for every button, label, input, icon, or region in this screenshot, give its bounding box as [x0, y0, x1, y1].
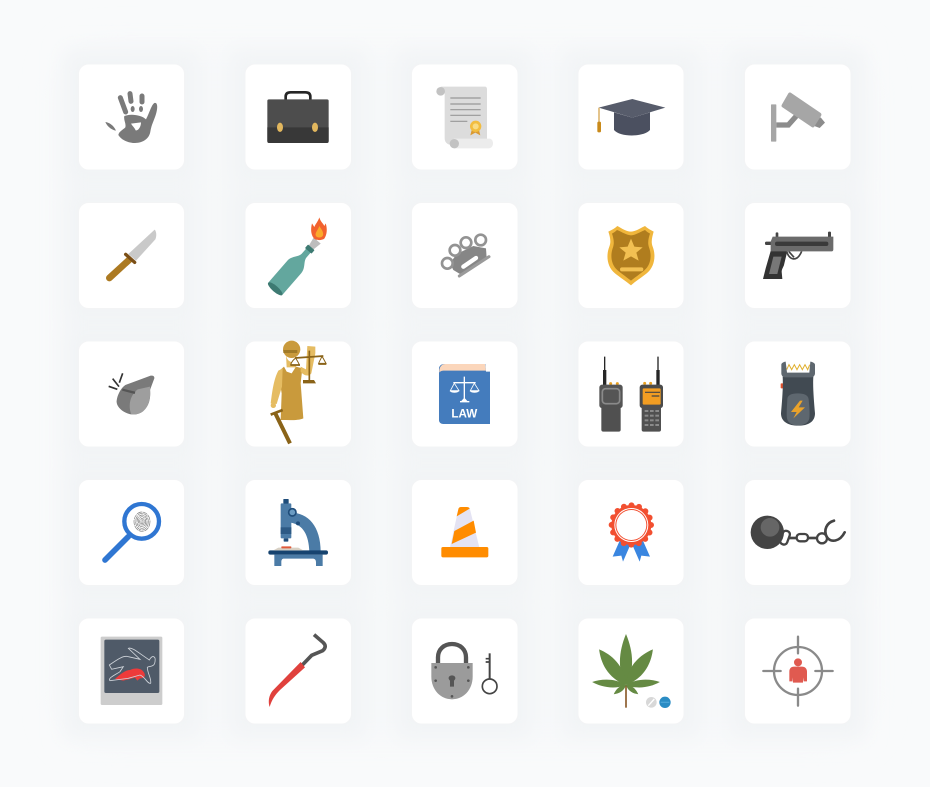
card: ball and chain [744, 480, 851, 586]
icon: lady justice [271, 341, 326, 443]
card: lady justice [245, 341, 352, 447]
card: brass knuckles [412, 202, 518, 308]
icon: police badge [607, 226, 654, 285]
card: molotov cocktail [245, 202, 352, 308]
icon: whistle [109, 373, 154, 415]
card: diploma scroll [412, 64, 518, 170]
icon: crowbar [269, 635, 325, 707]
icon: fingerprint magnifier [105, 504, 159, 560]
card: traffic cone [412, 480, 518, 586]
card: stun gun [744, 341, 851, 447]
card: whistle [78, 341, 184, 447]
icon: brass knuckles [442, 235, 489, 276]
icon: cannabis leaf and pills [592, 634, 671, 708]
icon: crime scene photo [101, 637, 162, 705]
card: law book [412, 341, 518, 447]
icon: security camera [771, 92, 825, 142]
card: crime scene photo [78, 618, 184, 724]
card: knife [78, 202, 184, 308]
icon: knife [109, 230, 156, 278]
card: award rosette [578, 480, 684, 586]
card: pistol [744, 202, 851, 308]
icon: handprint [105, 94, 157, 143]
icon: award rosette [611, 505, 651, 562]
card: fingerprint magnifier [78, 480, 184, 586]
card: cannabis leaf and pills [578, 618, 684, 724]
card: padlock and key [412, 618, 518, 724]
icon: stun gun [781, 362, 815, 426]
card: handprint [78, 64, 184, 170]
icon: padlock and key [431, 644, 497, 699]
icon: ball and chain [751, 516, 845, 549]
icon: target crosshair [763, 637, 833, 706]
card: crowbar [245, 618, 352, 724]
card: microscope [245, 480, 352, 586]
icon: law book: LAW [451, 408, 477, 421]
icon: diploma scroll [436, 87, 493, 148]
card: police badge [578, 202, 684, 308]
icon: molotov cocktail [266, 217, 327, 297]
card: graduation cap [578, 64, 684, 170]
icon: pistol [763, 232, 833, 279]
icon: graduation cap [597, 99, 665, 135]
card: security camera [744, 64, 851, 170]
icon: briefcase [267, 92, 329, 143]
icon: traffic cone [441, 507, 488, 557]
icon: walkie talkies [599, 357, 663, 432]
icon: microscope [268, 499, 328, 566]
card: briefcase [245, 64, 352, 170]
card: walkie talkies [578, 341, 684, 447]
card: target crosshair [744, 618, 851, 724]
